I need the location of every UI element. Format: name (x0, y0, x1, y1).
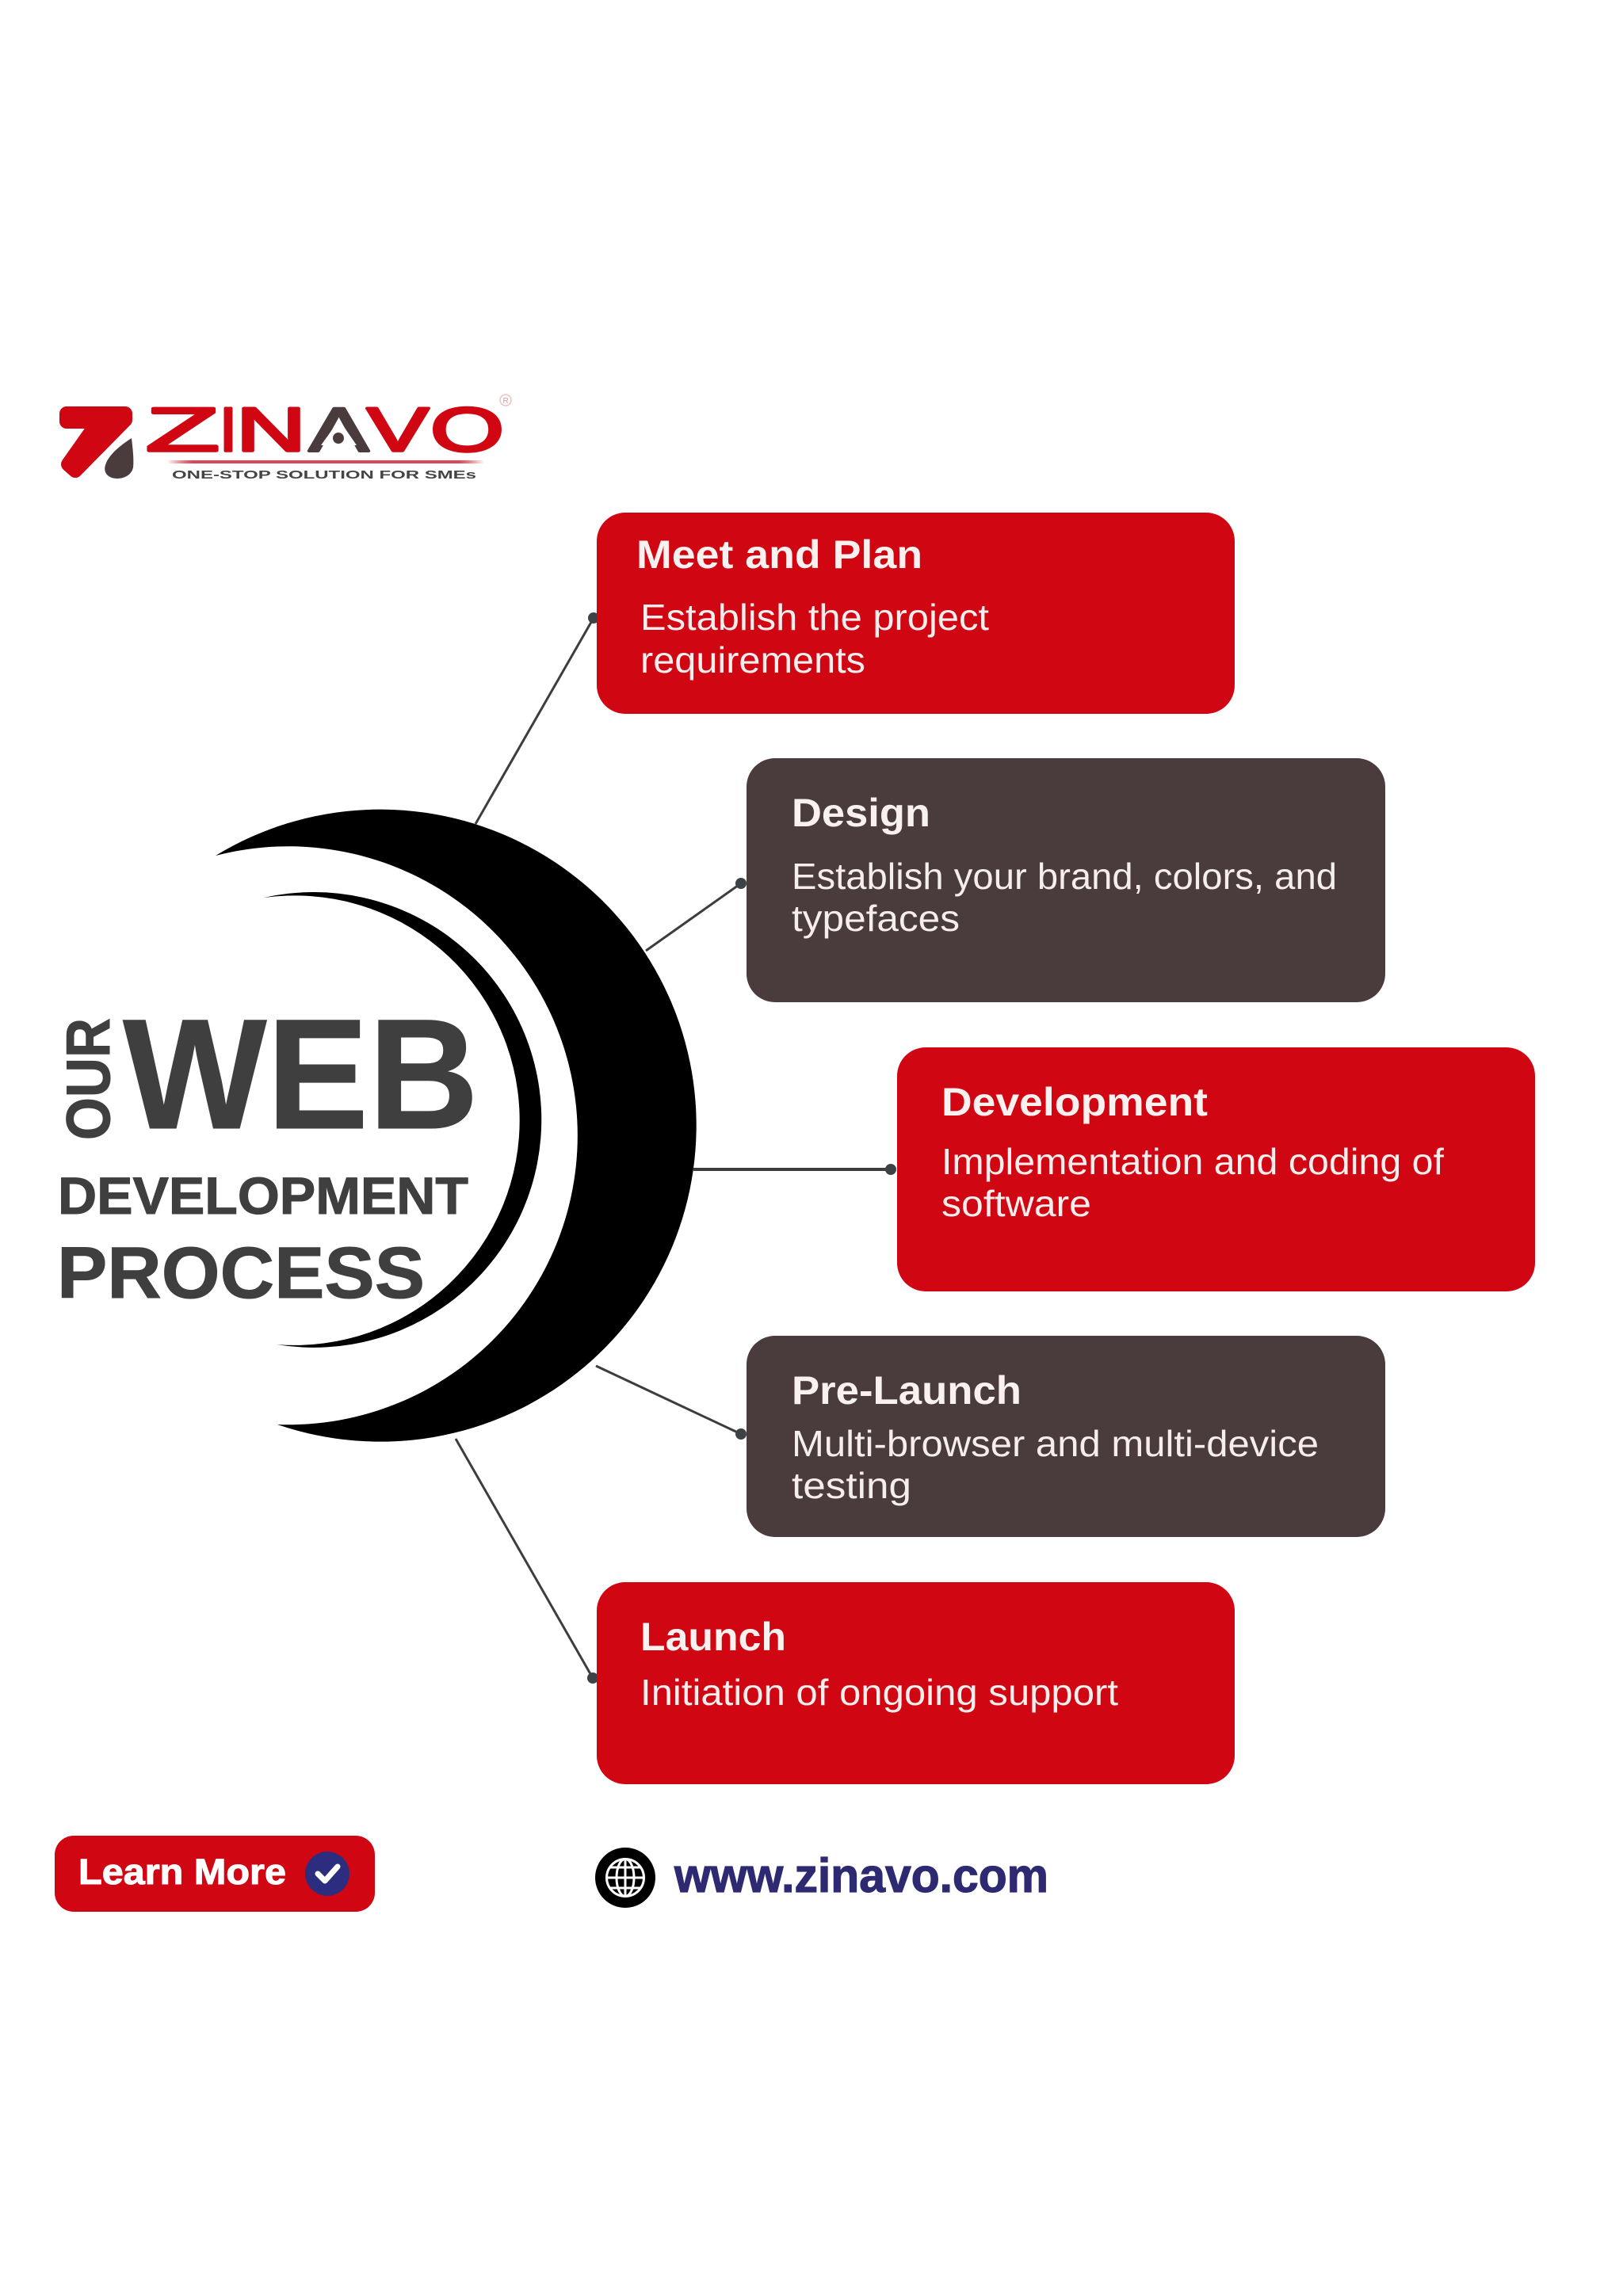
connector: Development (693, 1164, 896, 1175)
logo wordmark: Z (146, 395, 220, 464)
logo wordmark: A (309, 395, 369, 464)
panel: Meet and Plan (597, 513, 1235, 714)
logo wordmark: I (220, 395, 237, 464)
website url: www.zinavo.com (674, 1849, 1048, 1902)
body text line 2: testing (792, 1465, 911, 1506)
title: Our Web Development Process (53, 986, 479, 1314)
panel: Design (747, 758, 1385, 1002)
logo: Zinavo (67, 395, 511, 482)
logo wordmark: N (236, 395, 306, 464)
body text: Implementation and coding of (941, 1141, 1444, 1182)
registered mark (500, 395, 511, 406)
connector: Launch (456, 1439, 598, 1684)
body text: Establish the project (640, 597, 989, 638)
heading: Meet and Plan (636, 532, 922, 577)
body text line 2: requirements (640, 639, 865, 681)
panel: Development (897, 1047, 1535, 1291)
body text line 2: software (941, 1183, 1091, 1224)
logo wordmark: O (430, 395, 504, 464)
connector: Pre-Launch (596, 1366, 747, 1440)
icon: globe (595, 1848, 655, 1908)
heading: Launch (640, 1615, 786, 1659)
title word: PROCESS: PROCESS (57, 1233, 425, 1314)
title word: OUR: OUR (53, 1018, 123, 1140)
thin crescent (264, 892, 541, 1348)
logo wordmark (146, 395, 504, 464)
icon: logo seven mark (67, 414, 125, 471)
body text: Initiation of ongoing support (640, 1672, 1118, 1713)
body text line 2: typefaces (792, 898, 960, 939)
website link (595, 1848, 1048, 1908)
connector lines (456, 612, 896, 1684)
connector: Meet and Plan (475, 612, 599, 824)
icon: logo drop (105, 438, 133, 479)
logo tagline: ONE-STOP SOLUTION FOR SMEs (172, 468, 476, 482)
body text: Multi-browser and multi-device (792, 1423, 1319, 1464)
heading: Design (792, 791, 930, 835)
registered mark: R (502, 397, 509, 406)
logo wordmark: V (367, 395, 429, 464)
body text: Establish your brand, colors, and (792, 856, 1337, 897)
panel: Launch (597, 1582, 1235, 1784)
button: Learn More (55, 1836, 375, 1912)
icon: check badge (305, 1852, 349, 1896)
connector: Design (646, 878, 747, 951)
panel: Pre-Launch (747, 1336, 1385, 1537)
large crescent (216, 810, 697, 1442)
title word: DEVELOPMENT: DEVELOPMENT (58, 1166, 468, 1225)
button label: Learn More (78, 1852, 286, 1892)
title word: WEB: WEB (123, 986, 479, 1161)
crescent graphic (216, 810, 697, 1442)
heading: Pre-Launch (792, 1368, 1022, 1413)
heading: Development (941, 1080, 1208, 1124)
